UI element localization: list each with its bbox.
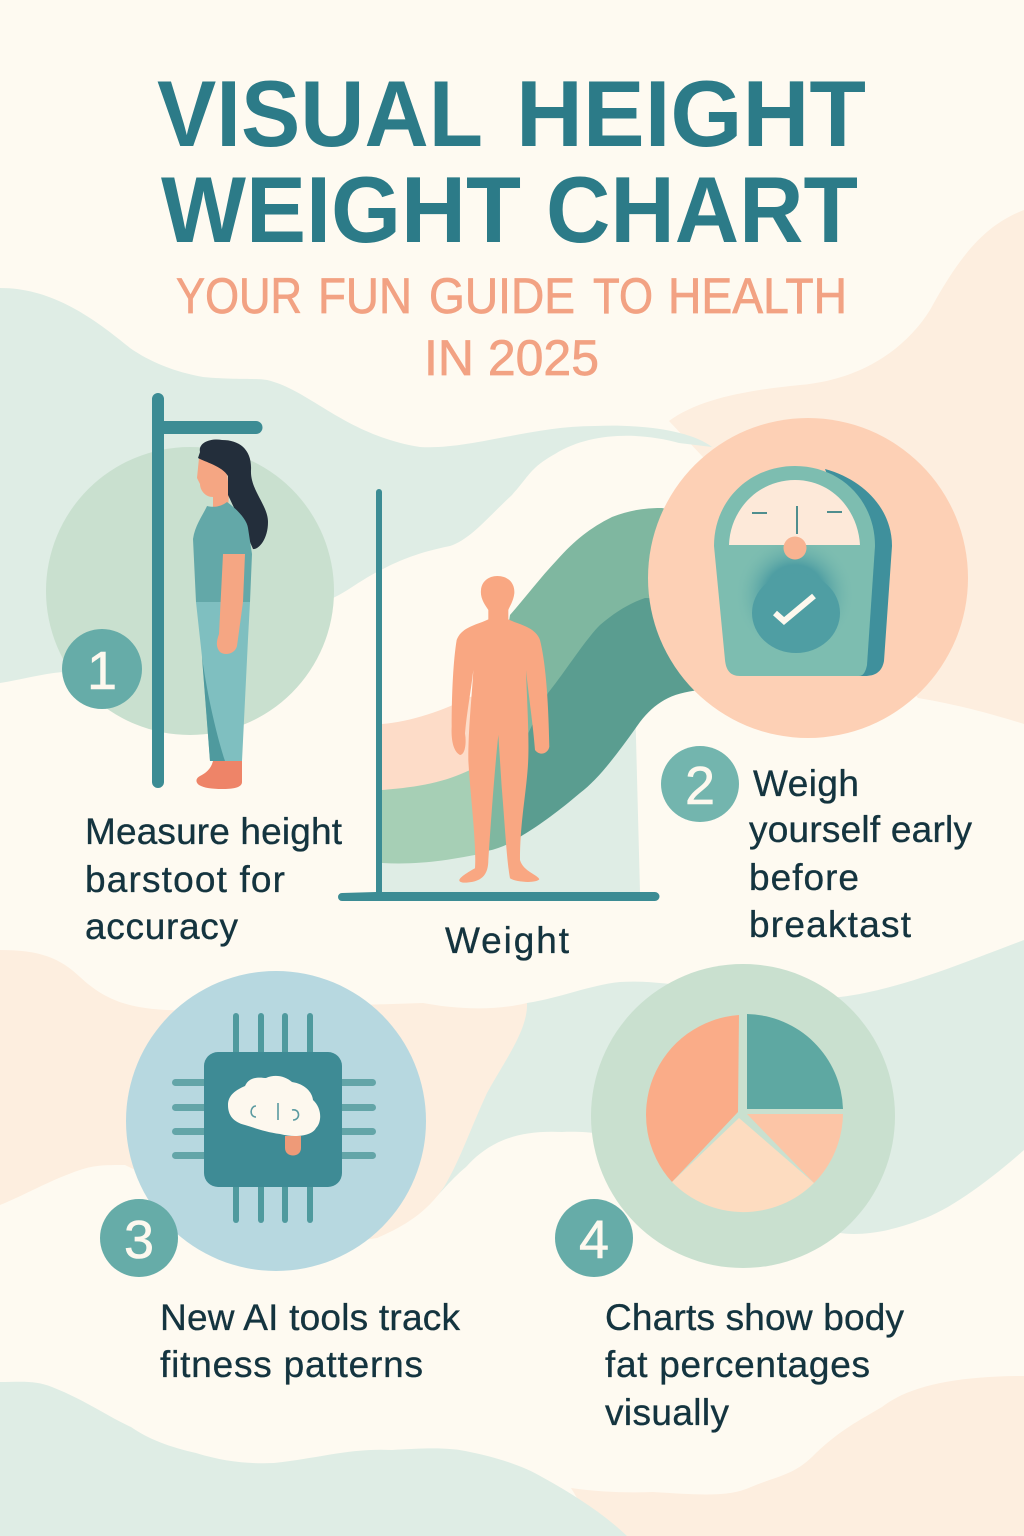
circle backdrop 2 bbox=[648, 418, 968, 738]
title: VISUAL bbox=[157, 61, 483, 166]
weight axis label: Weight bbox=[445, 920, 570, 961]
step 1 caption: accuracy bbox=[85, 906, 238, 947]
panel: step 3 AI tools bbox=[100, 971, 460, 1385]
step 3 caption: New AI tools track bbox=[160, 1297, 460, 1338]
step number badge 4: 4 bbox=[579, 1210, 609, 1270]
step 2 caption: before bbox=[749, 857, 859, 898]
step 2 caption: yourself early bbox=[749, 809, 972, 850]
circle backdrop 3 bbox=[126, 971, 426, 1271]
subtitle bbox=[176, 268, 847, 386]
step number badge 2 bbox=[661, 746, 739, 822]
step number badge 1 bbox=[62, 629, 142, 709]
step 4 caption bbox=[605, 1297, 904, 1433]
subtitle: IN 2025 bbox=[424, 330, 599, 386]
step 1 caption: Measure height bbox=[85, 811, 343, 852]
title: CHART bbox=[546, 157, 858, 262]
step 3 caption: fitness patterns bbox=[160, 1344, 423, 1385]
standing woman figure bbox=[193, 440, 268, 789]
subtitle: HEALTH bbox=[668, 268, 847, 324]
step number badge 3 bbox=[100, 1199, 178, 1277]
title: WEIGHT bbox=[161, 157, 521, 262]
step 2 caption: breaktast bbox=[749, 904, 912, 945]
vertical axis bbox=[338, 489, 660, 901]
panel: step 2 weigh yourself bbox=[648, 418, 972, 945]
circle backdrop 4 bbox=[591, 964, 895, 1268]
height measuring pole bbox=[152, 393, 262, 788]
step number badge 1: 1 bbox=[87, 641, 117, 701]
step 1 caption bbox=[85, 811, 343, 947]
step number badge 4 bbox=[555, 1199, 633, 1277]
pie chart bbox=[646, 1014, 843, 1212]
swoosh bands behind figure bbox=[382, 508, 720, 892]
panel: step 4 body fat charts bbox=[555, 964, 904, 1433]
subtitle: GUIDE bbox=[429, 268, 575, 324]
step 3 caption bbox=[160, 1297, 460, 1385]
subtitle: FUN bbox=[318, 268, 412, 324]
icon: bathroom scale bbox=[714, 466, 892, 676]
subtitle: YOUR bbox=[176, 268, 302, 324]
icon: AI chip bbox=[172, 1013, 376, 1223]
step 1 caption: barstoot for bbox=[85, 859, 285, 900]
human body silhouette bbox=[452, 576, 549, 883]
step number badge 2: 2 bbox=[685, 756, 715, 816]
subtitle: TO bbox=[593, 268, 653, 324]
step 4 caption: fat percentages bbox=[605, 1344, 870, 1385]
title bbox=[157, 61, 866, 262]
title: HEIGHT bbox=[516, 61, 866, 166]
step 2 caption bbox=[749, 763, 972, 945]
step 2 caption: Weigh bbox=[753, 763, 859, 804]
panel: step 1 measure height bbox=[46, 393, 343, 947]
step number badge 3: 3 bbox=[124, 1210, 154, 1270]
step 4 caption: Charts show body bbox=[605, 1297, 904, 1338]
step 4 caption: visually bbox=[605, 1392, 730, 1433]
circle backdrop 1 bbox=[46, 447, 334, 735]
panel: body weight chart bbox=[338, 489, 720, 961]
